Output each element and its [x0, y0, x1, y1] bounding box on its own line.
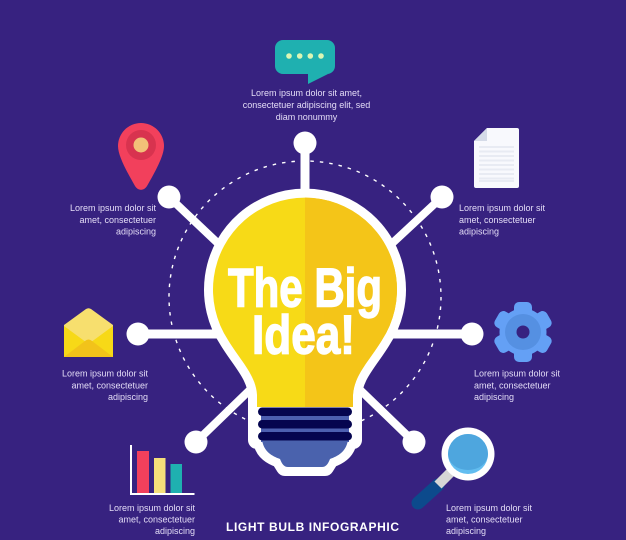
- text: lower right caption: adipiscing: [446, 526, 486, 536]
- headline: [228, 256, 382, 366]
- text: left caption: Lorem ipsum dolor sit: [62, 368, 148, 378]
- headline: Idea!: [252, 304, 355, 366]
- text: upper left caption: amet, consectetuer: [79, 215, 156, 225]
- text: upper left caption: Lorem ipsum dolor sit: [70, 203, 156, 213]
- icon: gear: [493, 302, 553, 362]
- text: lower left caption: Lorem ipsum dolor sit: [109, 503, 195, 513]
- text: right caption: amet, consectetuer: [474, 380, 551, 390]
- icon: magnifying glass: [418, 428, 494, 503]
- text: upper right caption: Lorem ipsum dolor sit: [459, 203, 546, 213]
- text: upper left caption: adipiscing: [116, 226, 156, 236]
- text: right caption: Lorem ipsum dolor sit: [474, 368, 561, 378]
- bulb glass left: [213, 198, 397, 407]
- text: top caption: diam nonummy: [276, 112, 338, 122]
- infographic canvas: [62, 40, 560, 536]
- light bulb: [213, 198, 397, 467]
- text: upper right caption: amet, consectetuer: [459, 215, 536, 225]
- title: light bulb infographic: LIGHT BULB INFOGRAPHIC: [226, 520, 399, 534]
- bulb glass right shade: [305, 198, 397, 407]
- bulb screw base: [258, 408, 352, 467]
- text: lower right caption: Lorem ipsum dolor sit: [446, 503, 533, 513]
- icon: envelope: [64, 308, 113, 357]
- headline: The Big: [228, 256, 382, 318]
- icon: speech bubble: [275, 40, 335, 84]
- text: lower left caption: amet, consectetuer: [118, 514, 195, 524]
- icon: document: [474, 128, 519, 188]
- text: upper right caption: adipiscing: [459, 226, 499, 236]
- text: top caption: Lorem ipsum dolor sit amet,: [251, 88, 362, 98]
- text: right caption: adipiscing: [474, 392, 514, 402]
- text: lower right caption: amet, consectetuer: [446, 514, 523, 524]
- icon: bar chart: [130, 445, 194, 495]
- text: top caption: consectetuer adipiscing elit, sed: [243, 100, 370, 110]
- connector lines and end nodes: [126, 132, 484, 454]
- text: left caption: amet, consectetuer: [71, 380, 148, 390]
- bulb white outline: [213, 198, 397, 467]
- icon: map pin: [118, 123, 164, 190]
- text: left caption: adipiscing: [108, 392, 148, 402]
- dashed orbit circle: [169, 161, 441, 433]
- text: lower left caption: adipiscing: [155, 526, 195, 536]
